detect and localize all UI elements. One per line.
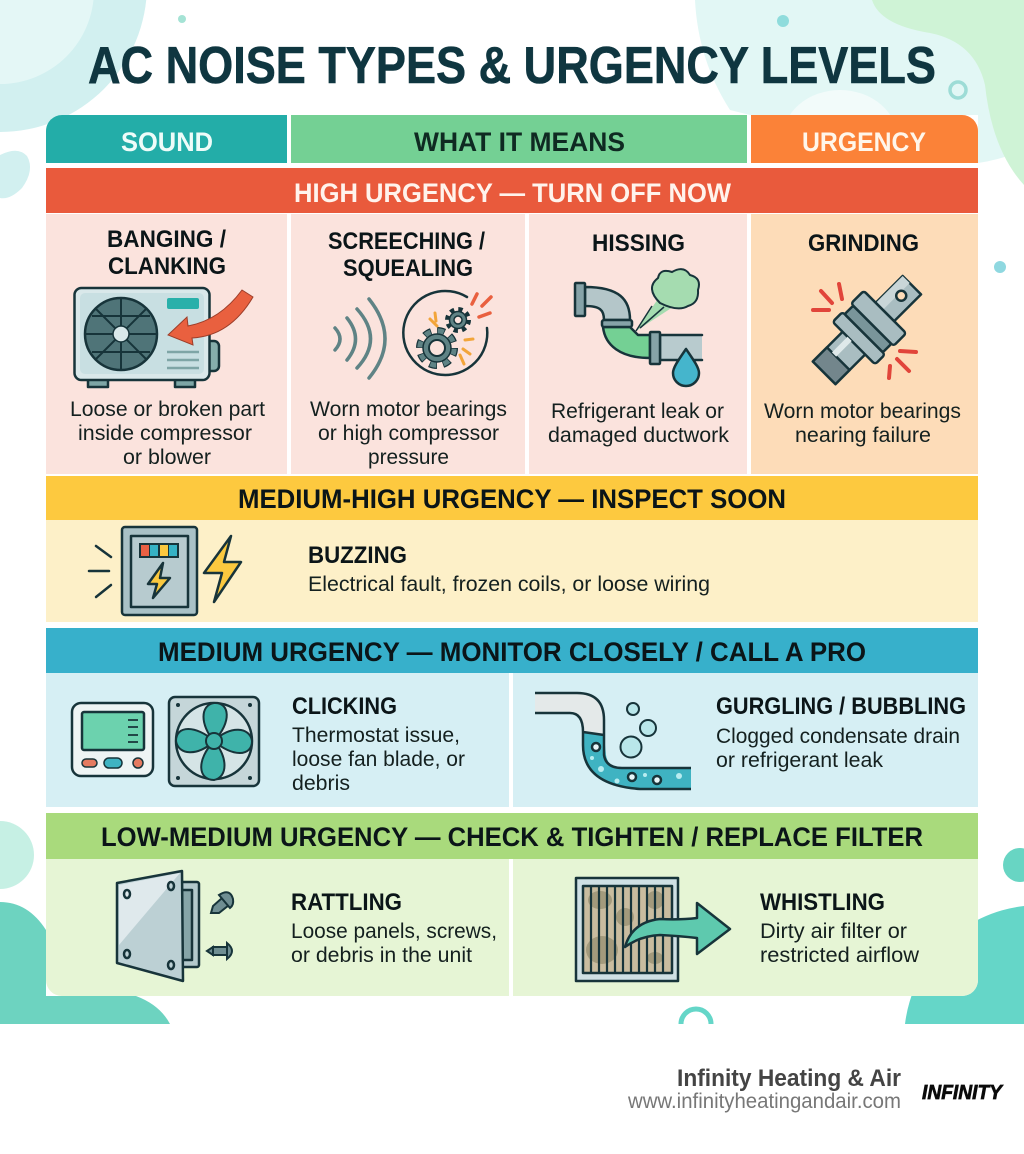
panel: banging / clanking (46, 214, 287, 474)
text: whistling: restricted airflow (760, 944, 920, 967)
text: whistling (760, 889, 920, 967)
panel: clicking (46, 673, 509, 807)
icon: fan (169, 697, 259, 786)
text: whistling: Dirty air filter or (760, 920, 907, 943)
text: buzzing: BUZZING (308, 542, 407, 569)
text: buzzing: Electrical fault, frozen coils, or loose wiring (308, 573, 710, 596)
icon: sound waves and gears (335, 291, 491, 378)
panel: hissing (529, 214, 747, 474)
description: screeching squealing: Worn motor bearings (310, 398, 507, 421)
text: buzzing (308, 542, 710, 596)
heading: banging clanking: BANGING / (107, 226, 226, 253)
icon: thermostat (72, 703, 153, 776)
text: clicking: debris (292, 772, 350, 795)
heading: screeching squealing: SCREECHING / (328, 228, 485, 255)
low-medium urgency banner (46, 813, 978, 859)
text: rattling: RATTLING (291, 889, 402, 916)
icon: worn bearing shaft (803, 264, 933, 394)
heading: screeching squealing: SQUEALING (343, 255, 473, 282)
icon: electrical panel with lightning (89, 527, 241, 615)
description: screeching squealing: or high compressor (318, 422, 499, 445)
low-medium urgency banner: LOW-MEDIUM URGENCY — CHECK & TIGHTEN / REPLACE FILTER (101, 822, 923, 852)
icon: loose panel and screws (117, 871, 233, 981)
description: hissing: Refrigerant leak or (551, 400, 724, 423)
description: screeching squealing: pressure (368, 446, 449, 469)
heading: banging clanking: CLANKING (108, 253, 226, 280)
text: gurgling bubbling: GURGLING / BUBBLING (716, 693, 966, 720)
description: grinding: nearing failure (795, 424, 931, 447)
medium-high urgency banner: MEDIUM-HIGH URGENCY — INSPECT SOON (238, 484, 786, 514)
header: urgency (751, 115, 978, 163)
description: banging clanking: Loose or broken part (70, 398, 265, 421)
icon: dirty filter with arrow (576, 878, 730, 981)
icon: outdoor AC unit with arrow (74, 288, 253, 387)
footer: company name and URL (627, 1065, 901, 1113)
panel: gurgling / bubbling (513, 673, 978, 807)
text: gurgling bubbling: or refrigerant leak (716, 749, 884, 772)
text: whistling: WHISTLING (760, 889, 885, 916)
panel: whistling (513, 859, 978, 996)
medium urgency banner: MEDIUM URGENCY — MONITOR CLOSELY / CALL A PRO (158, 637, 866, 667)
panel: screeching / squealing (291, 214, 525, 474)
panel: grinding (751, 214, 978, 474)
icon: leaking pipe (575, 269, 702, 386)
medium-high urgency banner (46, 476, 978, 520)
description: grinding: Worn motor bearings (764, 400, 961, 423)
heading: grinding: GRINDING (808, 230, 919, 257)
header: sound (46, 115, 287, 163)
table header row (46, 115, 978, 163)
high urgency banner (46, 168, 978, 213)
icon: drain pipe with bubbles (535, 693, 691, 789)
footer: infinity logo: INFINITY (922, 1082, 1004, 1104)
header: what it means (291, 115, 747, 163)
footer: company name and URL: Infinity Heating & Air (677, 1065, 901, 1092)
high urgency banner: HIGH URGENCY — TURN OFF NOW (294, 178, 731, 208)
text: rattling (291, 889, 497, 967)
text: clicking: loose fan blade, or (292, 748, 465, 771)
description: banging clanking: or blower (123, 446, 211, 469)
text: clicking: CLICKING (292, 693, 397, 720)
description: banging clanking: inside compressor (78, 422, 252, 445)
text: clicking: Thermostat issue, (292, 724, 460, 747)
text: gurgling bubbling (716, 693, 966, 772)
medium urgency banner (46, 628, 978, 673)
header: urgency: URGENCY (802, 127, 926, 157)
panel: rattling (46, 859, 509, 996)
text: gurgling bubbling: Clogged condensate drain (716, 725, 960, 748)
header: what it means: WHAT IT MEANS (414, 127, 625, 157)
panel: buzzing (46, 520, 978, 622)
text: clicking (292, 693, 465, 795)
text: rattling: or debris in the unit (291, 944, 472, 967)
text: rattling: Loose panels, screws, (291, 920, 497, 943)
description: hissing: damaged ductwork (548, 424, 730, 447)
heading: hissing: HISSING (592, 230, 685, 257)
header: sound: SOUND (121, 127, 213, 157)
footer: company name and URL: www.infinityheatingandair.com (627, 1090, 901, 1113)
